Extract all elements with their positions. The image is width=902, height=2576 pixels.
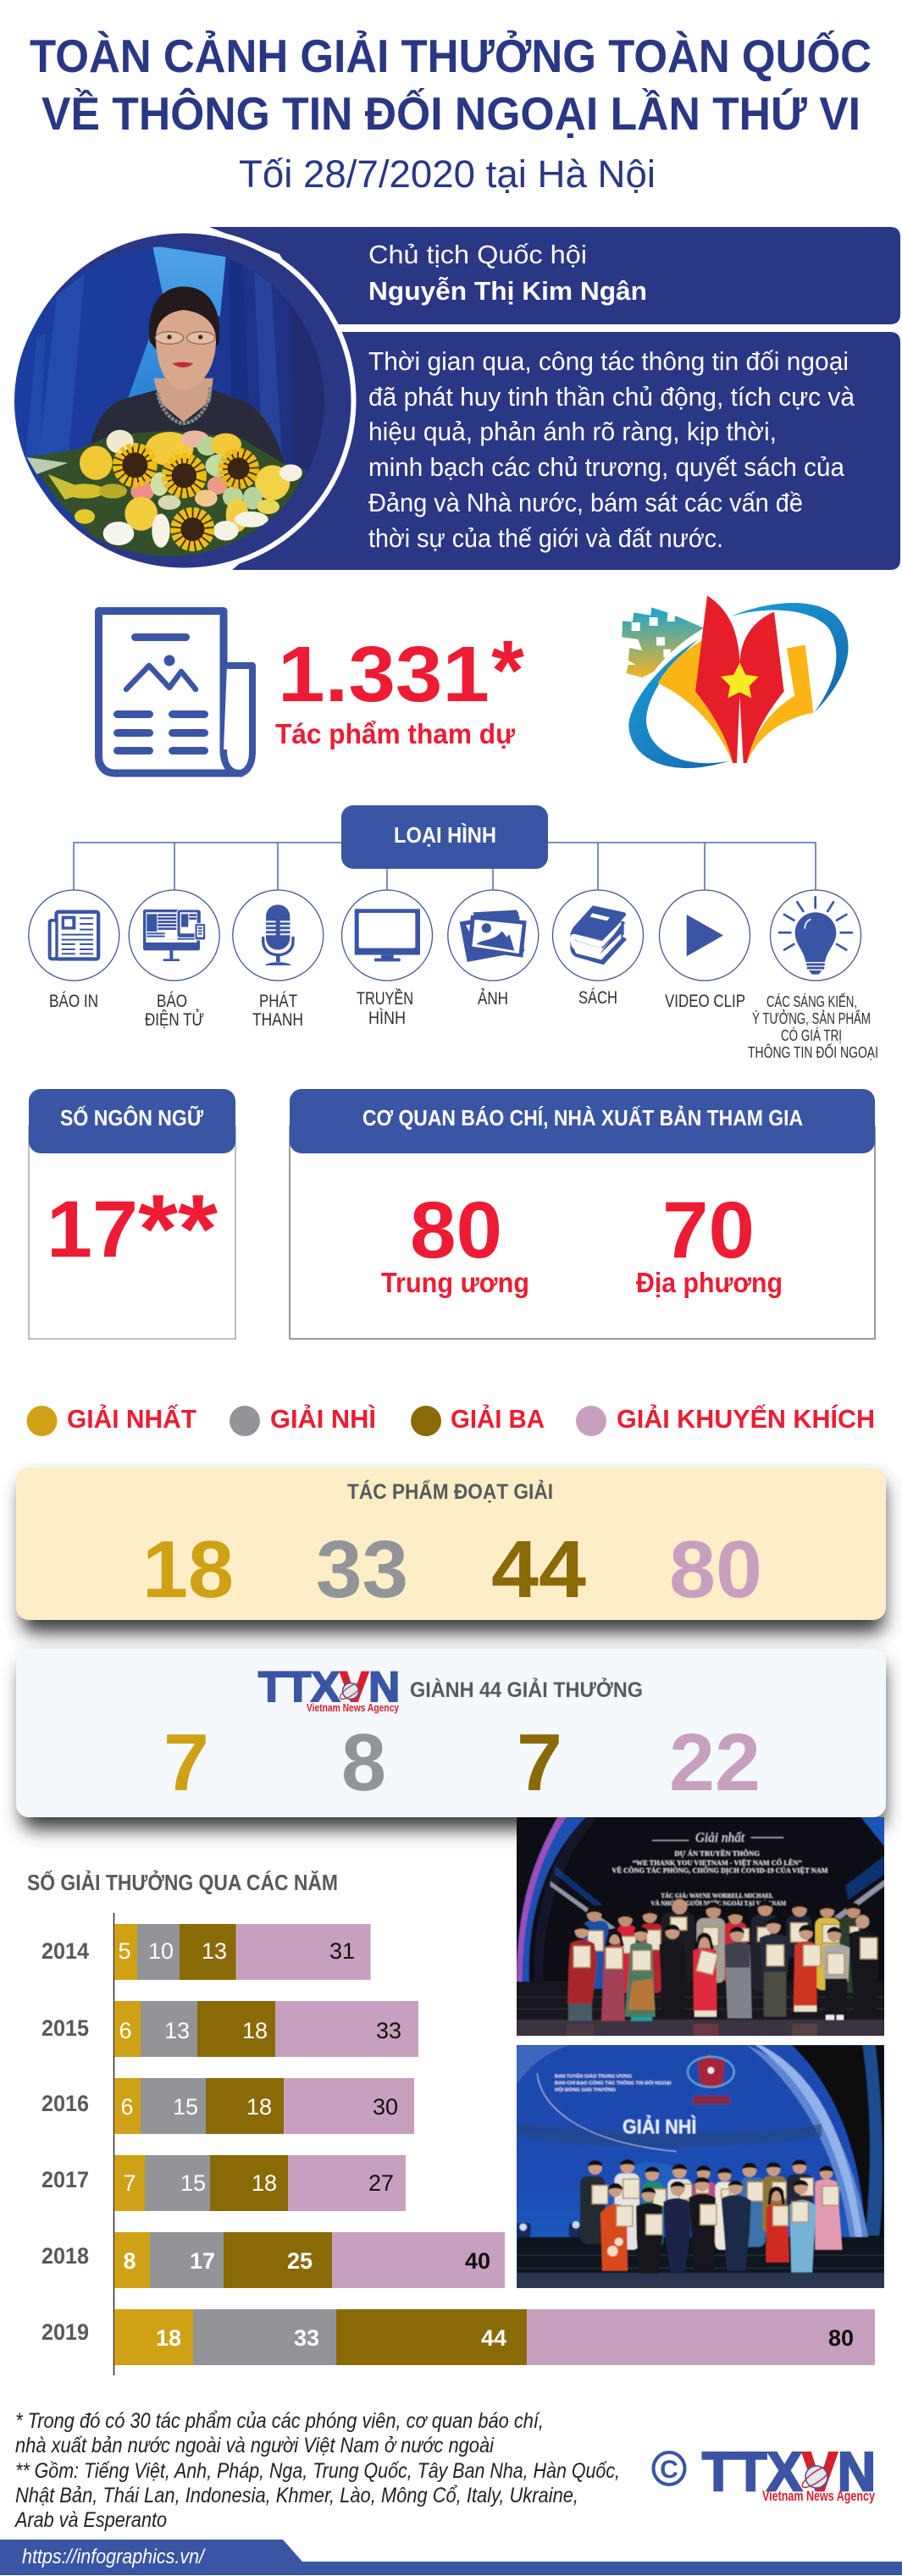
sunflowers	[118, 448, 152, 483]
heading: awards over the years: SỐ GIẢI THƯỞNG QUA CÁC NĂM	[27, 1869, 338, 1895]
icon: television	[342, 890, 432, 981]
panel: quote: Đảng và Nhà nước, bám sát các vấn đề	[368, 488, 803, 517]
stage text: BAN CHỈ ĐẠO CÔNG TÁC THÔNG TIN ĐỐI NGOẠI	[555, 2080, 672, 2087]
labels: media types: BÁO IN	[49, 992, 98, 1011]
bar 2016	[42, 2078, 414, 2134]
bar 2017: 18	[252, 2170, 277, 2196]
bar 2018: 40	[465, 2248, 490, 2274]
front row	[567, 1915, 880, 2021]
title	[30, 30, 872, 140]
winning works numbers	[142, 1524, 762, 1615]
bar 2016: 2016	[42, 2091, 89, 2116]
stat: local: Địa phương	[636, 1267, 783, 1298]
bar 2019: 44	[481, 2325, 506, 2351]
stage text: TÁC GIẢ: WAYNE WORRELL MICHAEL	[661, 1893, 773, 1899]
bar 2016: 30	[373, 2094, 398, 2120]
bar 2015: 2015	[42, 2015, 89, 2041]
heading: winning works: TÁC PHẨM ĐOẠT GIẢI	[347, 1479, 553, 1504]
bar 2014: 2014	[42, 1938, 89, 1964]
stage text: GIẢI NHÌ	[623, 2114, 696, 2138]
footnotes: * Trong đó có 30 tác phẩm của các phóng viên, cơ quan báo chí,	[15, 2409, 544, 2433]
TTXVN numbers: 7	[517, 1717, 562, 1808]
heading: TTXVN awards: GIÀNH 44 GIẢI THƯỞNG	[410, 1677, 643, 1702]
labels: media types: TRUYỀN	[357, 989, 413, 1009]
back row	[580, 2159, 842, 2250]
labels: media types: ẢNH	[478, 989, 508, 1009]
bar 2017: 15	[180, 2170, 206, 2196]
bar 2014: 10	[148, 1938, 174, 1964]
labels: media types: CÓ GIÁ TRỊ	[781, 1026, 842, 1044]
stat: 17 languages	[47, 1175, 218, 1284]
stat: 1.331 works: *	[491, 623, 524, 718]
dress	[91, 390, 285, 468]
bar 2016: 6	[120, 2094, 134, 2120]
icon: photos	[448, 890, 539, 981]
footnotes	[14, 2409, 620, 2532]
footnotes: nhà xuất bản nước ngoài và người Việt Nam ở nước ngoài	[15, 2434, 495, 2457]
stat label: Tác phẩm tham dự	[275, 718, 515, 749]
flowers	[27, 430, 307, 559]
bar 2018: 8	[123, 2248, 136, 2274]
bar 2017: 2017	[42, 2167, 89, 2192]
panel: quote: đã phát huy tinh thần chủ động, tích cực và	[368, 382, 855, 412]
labels: media types: BÁO	[157, 992, 187, 1011]
bar 2014: 5	[118, 1938, 131, 1964]
labels: media types: PHÁT	[259, 992, 297, 1011]
labels: media types: ĐIỆN TỬ	[145, 1009, 204, 1030]
bar 2014: 13	[202, 1938, 227, 1964]
panel: quote: minh bạch các chủ trương, quyết sách của	[368, 452, 845, 482]
hair	[149, 286, 219, 350]
face	[156, 310, 216, 390]
heading: media types	[341, 805, 548, 869]
stat: central: 80	[410, 1186, 502, 1275]
footer bar: https://infographics.vn/	[22, 2546, 206, 2568]
TTXVN numbers: 7	[163, 1717, 209, 1808]
icon: online news	[129, 890, 219, 981]
TTXVN numbers: 8	[341, 1717, 386, 1808]
panel: quote: Thời gian qua, công tác thông tin đối ngoại	[368, 346, 849, 376]
stat: 17 languages: **	[138, 1175, 218, 1284]
bar 2015: 6	[119, 2018, 132, 2043]
labels: media types: SÁCH	[578, 988, 617, 1008]
bar 2018: 25	[287, 2248, 313, 2274]
bar 2017: 27	[368, 2170, 394, 2196]
labels: media types: VIDEO CLIP	[665, 992, 745, 1011]
title: VỀ THÔNG TIN ĐỐI NGOẠI LẦN THỨ VI	[42, 87, 860, 140]
panel: languages	[29, 1089, 235, 1339]
winning works numbers: 33	[316, 1524, 408, 1615]
logo: TTXVN: TTXVN	[258, 1663, 400, 1711]
legend: GIẢI BA	[451, 1404, 545, 1434]
TTXVN numbers: 22	[669, 1717, 761, 1808]
stat: 17 languages: 17	[47, 1185, 138, 1274]
stage text	[612, 1831, 828, 1907]
stage text: Giải nhất	[695, 1831, 745, 1845]
icon: newspaper	[98, 611, 252, 773]
legend	[27, 1404, 875, 1436]
footer bar	[0, 2540, 902, 2575]
stage text: VỀ CÔNG TÁC PHÒNG, CHỐNG DỊCH COVID-19 CỦA VIỆT NAM	[612, 1866, 828, 1875]
stage logo	[688, 2054, 734, 2104]
logo: copyright TTXVN: TTXVN	[702, 2441, 876, 2502]
bar 2014: 31	[329, 1938, 355, 1964]
bar 2018: 2018	[42, 2243, 89, 2269]
icon: light bulb	[771, 890, 860, 981]
panel: quote	[232, 332, 900, 570]
bar 2017	[42, 2155, 406, 2211]
bar 2016: 18	[246, 2094, 272, 2120]
logo: TTXVN: Vietnam News Agency	[307, 1701, 400, 1714]
legend: GIẢI KHUYẾN KHÍCH	[617, 1404, 875, 1434]
panel: TTXVN awards	[16, 1649, 886, 1829]
bar 2014	[42, 1924, 371, 1980]
back row	[583, 1899, 861, 1993]
footnotes: Nhật Bản, Thái Lan, Indonesia, Khmer, Lào, Mông Cổ, Italy, Ukraine,	[15, 2484, 578, 2507]
panel: speaker title	[209, 227, 900, 324]
winning works numbers: 44	[491, 1524, 586, 1615]
stage text: VÀ NHÓM NGƯỜI NƯỚC NGOÀI TẠI VIỆT NAM	[651, 1900, 787, 1907]
winning works numbers: 18	[142, 1524, 234, 1615]
icon: video play	[659, 890, 750, 981]
icon: print newspaper	[29, 890, 119, 981]
labels: media types: HÌNH	[368, 1009, 406, 1028]
stage text: “WE THANK YOU VIETNAM - VIỆT NAM CỐ LÊN”	[633, 1858, 802, 1866]
panel: quote: hiệu quả, phản ánh rõ ràng, kịp thời,	[368, 417, 777, 446]
stage text: BAN TUYÊN GIÁO TRUNG ƯƠNG	[555, 2072, 633, 2079]
connector lines	[74, 843, 816, 890]
labels: media types: THANH	[252, 1010, 303, 1030]
TTXVN numbers	[163, 1717, 761, 1808]
icon: microphone	[233, 890, 324, 981]
front row	[600, 2177, 816, 2274]
bar 2017: 7	[123, 2170, 136, 2196]
bar 2019	[42, 2309, 875, 2365]
heading: press agencies: CƠ QUAN BÁO CHÍ, NHÀ XUẤT BẢN THAM GIA	[362, 1105, 803, 1130]
panel: quote: thời sự của thế giới và đất nước.	[368, 523, 723, 553]
bar 2018: 17	[190, 2248, 215, 2274]
logo: copyright TTXVN: C	[660, 2456, 678, 2484]
necklace	[158, 387, 210, 423]
bar 2019: 18	[156, 2325, 181, 2351]
panel: winning works	[16, 1468, 886, 1633]
photo: first prize ceremony	[512, 1812, 888, 2038]
panel: press agencies	[290, 1089, 875, 1339]
bar 2019: 2019	[42, 2319, 89, 2345]
winning works numbers: 80	[669, 1524, 762, 1615]
legend: GIẢI NHẤT	[67, 1404, 196, 1434]
stat: local	[636, 1186, 783, 1298]
bar 2015	[42, 2001, 418, 2057]
stage text	[555, 2072, 696, 2138]
chart: awards by year	[42, 1913, 875, 2375]
heading: languages: SỐ NGÔN NGỮ	[60, 1105, 203, 1130]
bar 2015: 33	[376, 2018, 401, 2043]
speaker name: Nguyễn Thị Kim Ngân	[368, 276, 647, 306]
speaker role: Chủ tịch Quốc hội	[368, 240, 587, 269]
bar 2015: 18	[242, 2018, 268, 2043]
labels: media types: CÁC SÁNG KIẾN,	[766, 992, 857, 1010]
bar 2015: 13	[164, 2018, 190, 2043]
stage text: HỘI ĐỒNG GIẢI THƯỞNG	[555, 2086, 617, 2092]
stat: central	[381, 1186, 529, 1298]
labels: media types	[49, 988, 878, 1061]
bar 2019: 80	[828, 2325, 854, 2351]
legend: GIẢI NHÌ	[270, 1404, 376, 1434]
portrait photo	[0, 230, 354, 571]
icon: books	[552, 890, 644, 981]
footnotes: ** Gồm: Tiếng Việt, Anh, Pháp, Nga, Trung Quốc, Tây Ban Nha, Hàn Quốc,	[15, 2459, 620, 2483]
bar 2016: 15	[173, 2094, 198, 2120]
year axis	[113, 1913, 115, 2375]
bar 2018	[42, 2232, 505, 2288]
photo: second prize ceremony	[512, 2041, 888, 2290]
logo: award	[622, 595, 849, 768]
bar 2019: 33	[294, 2325, 319, 2351]
stat: central: Trung ương	[381, 1267, 529, 1298]
stat: 1.331 works: 1.331	[278, 630, 490, 718]
stage text: DỰ ÁN TRUYỀN THÔNG	[674, 1849, 760, 1858]
footnotes: Arab và Esperanto	[14, 2508, 167, 2532]
stat: local: 70	[662, 1186, 755, 1275]
subtitle: Tối 28/7/2020 tại Hà Nội	[239, 152, 656, 196]
heading: media types: LOẠI HÌNH	[394, 822, 496, 848]
